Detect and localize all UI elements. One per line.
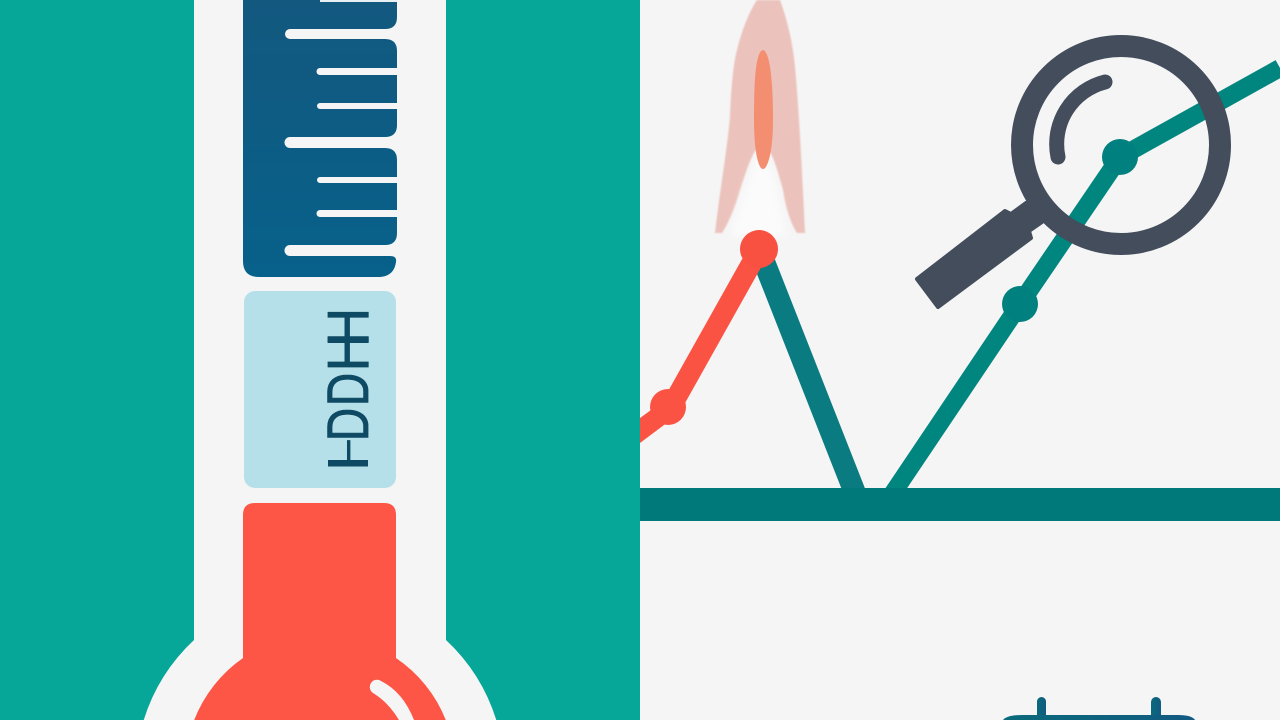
line chart: falling teal segment <box>759 249 855 493</box>
teal data point lower <box>1002 286 1038 322</box>
flame orange centre <box>754 50 773 169</box>
rotated label text: ⊢ <box>317 437 381 466</box>
thermometer red mercury <box>194 503 446 720</box>
thermometer white body <box>144 0 496 720</box>
flame outer <box>715 0 805 233</box>
rotated label text: HH <box>315 308 380 371</box>
panel: right background <box>640 0 1280 720</box>
magnifier ring <box>1022 46 1220 244</box>
calendar left ring <box>1037 697 1046 720</box>
calendar body <box>1003 715 1195 720</box>
line chart: rising teal line <box>893 68 1280 493</box>
line chart: baseline <box>640 488 1280 521</box>
panel: teal left background <box>0 0 640 720</box>
thermometer light blue label <box>244 291 396 488</box>
rotated label text: DD <box>316 373 381 441</box>
red data point upper <box>740 230 778 268</box>
icon: thermometer <box>144 0 496 720</box>
teal data point upper <box>1102 139 1138 175</box>
bulb highlight <box>370 680 414 720</box>
rotated label text <box>315 308 381 466</box>
line chart: red segment <box>640 230 778 443</box>
icon: calendar <box>1003 697 1195 720</box>
thermometer blue scale <box>243 0 397 277</box>
icon: flame <box>715 0 805 236</box>
red data point lower <box>650 389 686 425</box>
magnifier glare <box>1057 82 1105 157</box>
icon: magnifying glass <box>917 46 1220 307</box>
magnifier handle <box>917 203 1042 307</box>
calendar right ring <box>1151 697 1161 720</box>
flame white core <box>730 150 786 236</box>
